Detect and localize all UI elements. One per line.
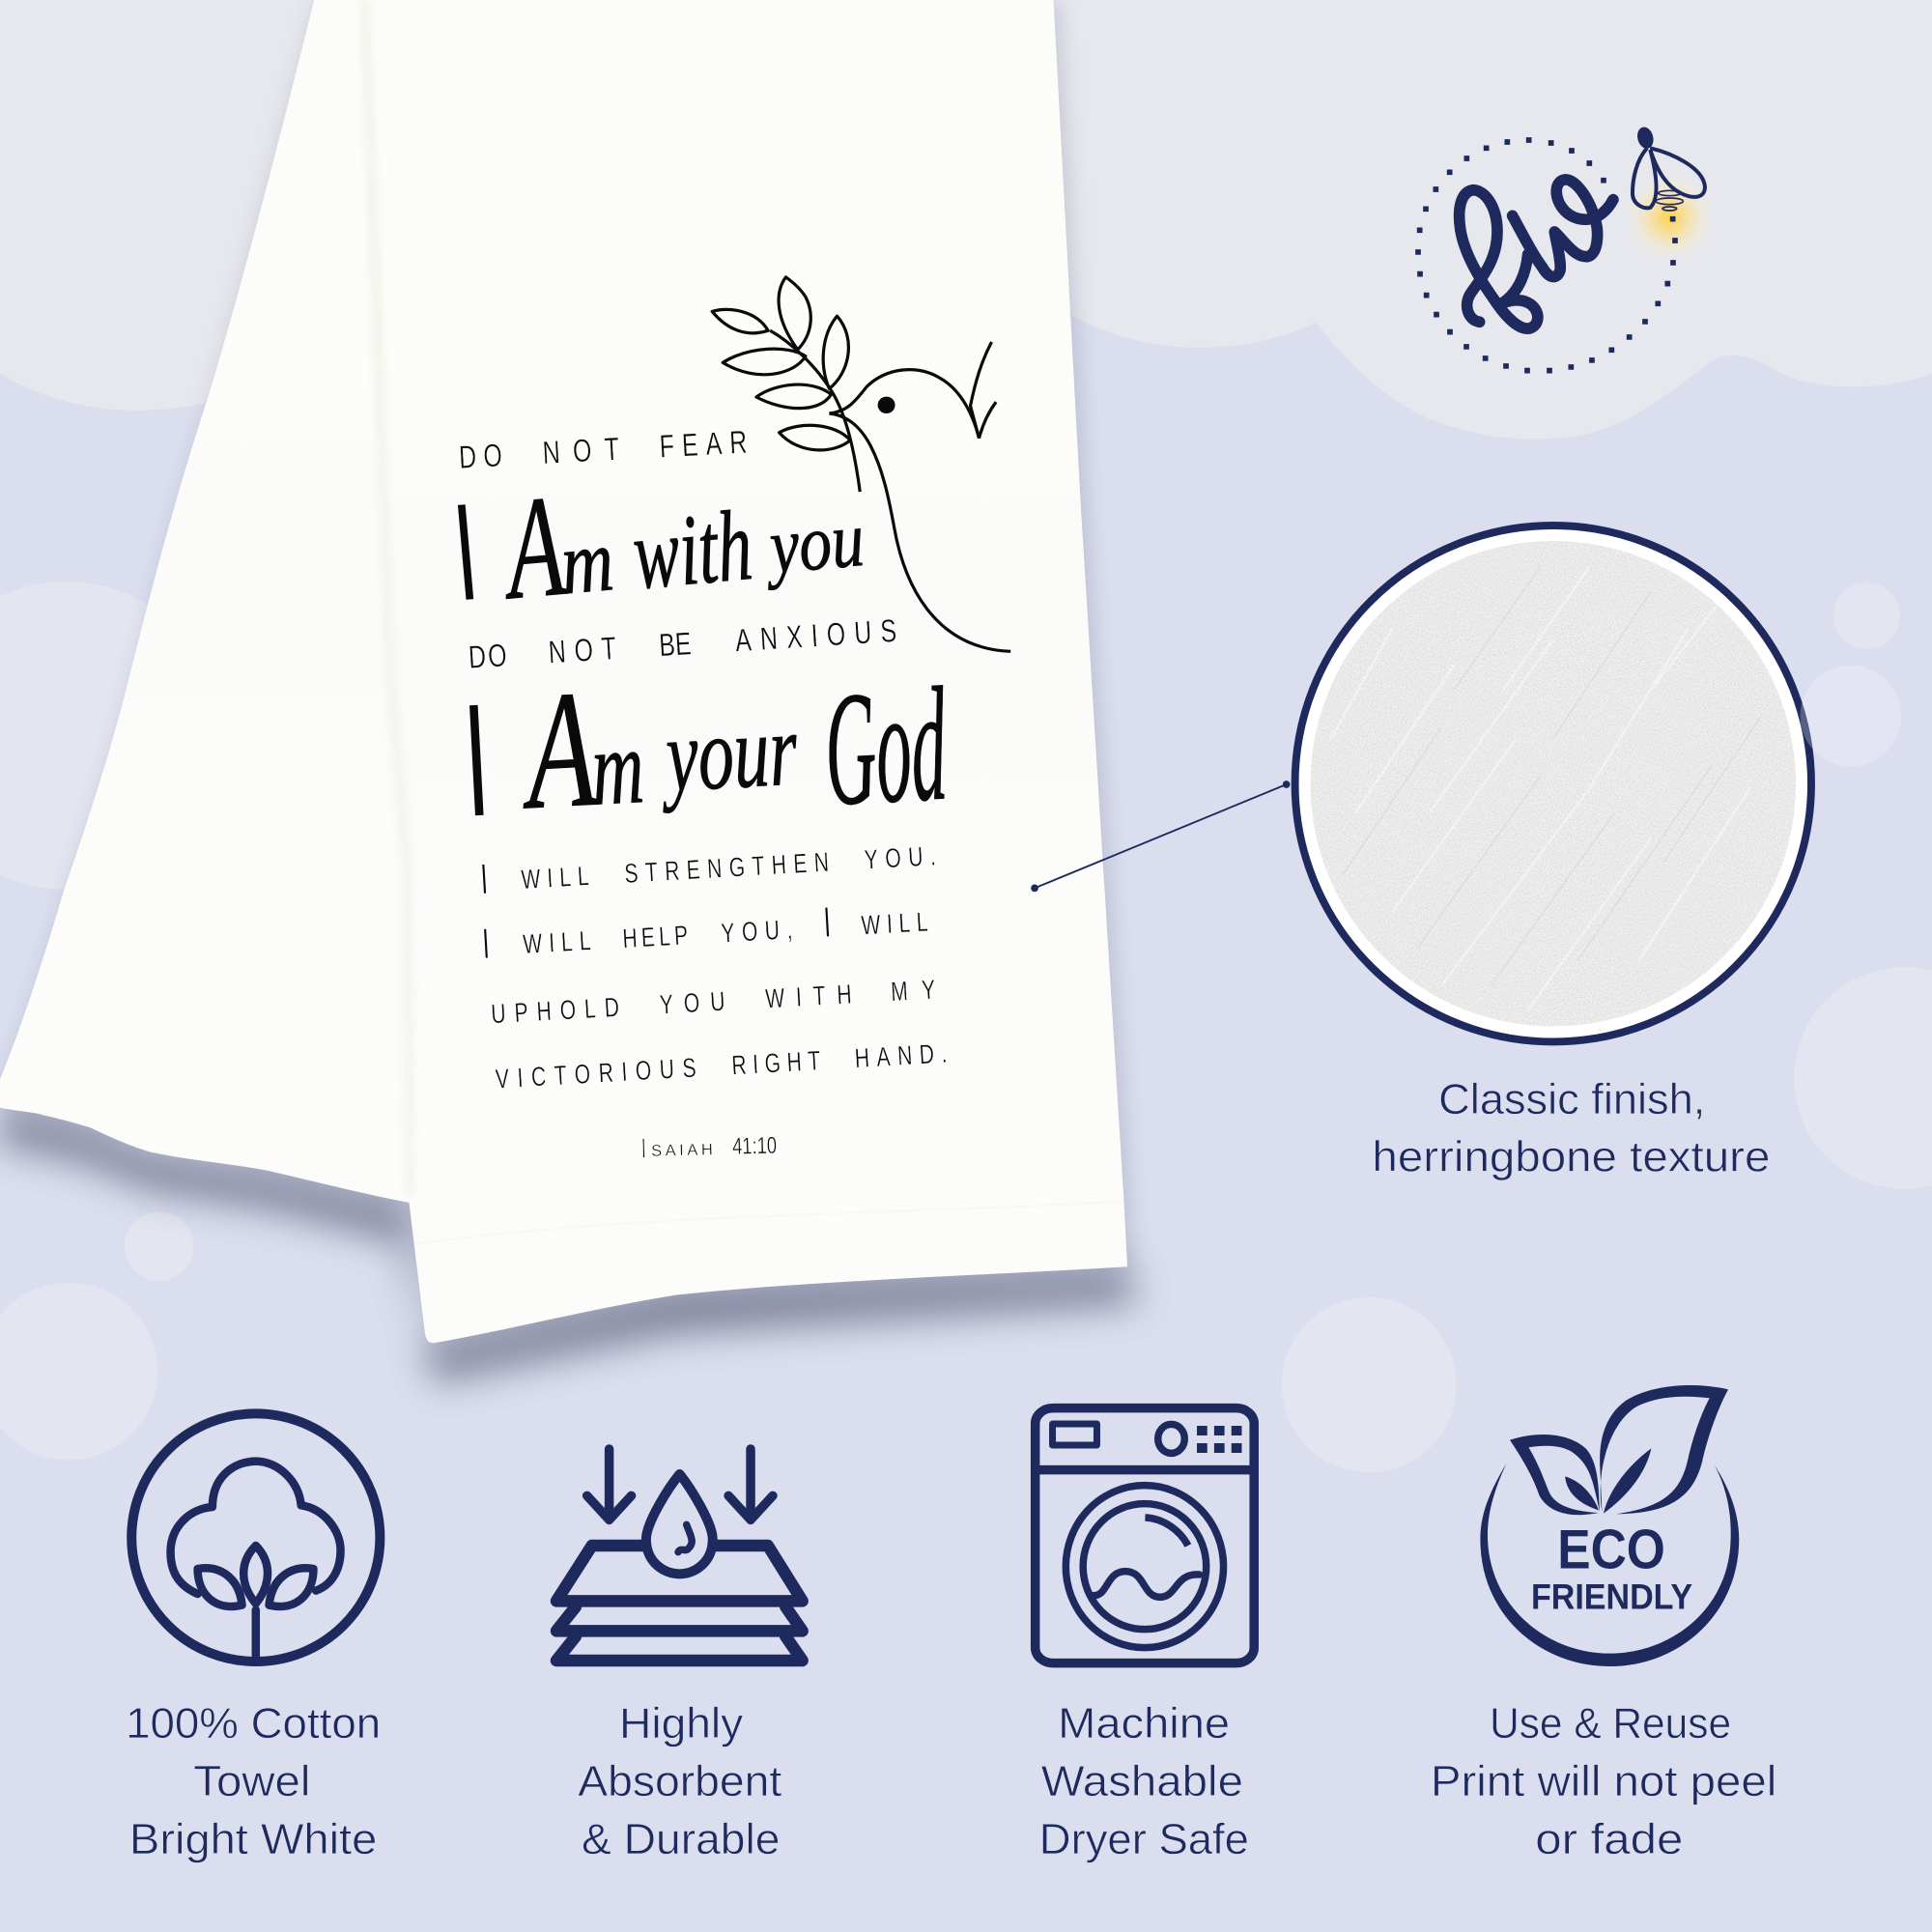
icon: cotton	[131, 1413, 380, 1662]
towel: back fold panel	[0, 0, 419, 1203]
towel text: I will help you, I will	[481, 895, 929, 968]
caption: absorbent: Highly	[619, 1700, 744, 1747]
caption: absorbent: & Durable	[582, 1816, 780, 1863]
towel text: I Am with you: with	[629, 489, 756, 611]
caption: classic finish: herringbone texture	[1372, 1133, 1770, 1180]
towel text: victorious right hand	[495, 1039, 948, 1094]
towel text: I will help you, I will: HELP	[622, 922, 689, 954]
icon: eco friendly badge: ECO	[1557, 1520, 1665, 1581]
caption: reuse: or fade	[1535, 1816, 1683, 1863]
fabric texture circle	[1295, 526, 1811, 1041]
towel text: Isaiah 41:10: I	[641, 1133, 646, 1163]
caption: cotton: Towel	[193, 1758, 310, 1805]
caption: washable: Washable	[1041, 1758, 1243, 1805]
towel text: I will help you, I will: I	[823, 899, 832, 946]
icon: eco friendly badge: FRIENDLY	[1531, 1577, 1692, 1616]
firefly glow	[1621, 169, 1718, 266]
caption: classic finish: Classic finish,	[1438, 1076, 1705, 1123]
towel drop shadow	[0, 0, 1136, 1382]
towel text: I Am with you: I	[448, 475, 483, 630]
towel text: I Am with you	[447, 439, 868, 635]
towel text: Isaiah 41:10	[641, 1130, 777, 1163]
towel text: I will strengthen you: I	[480, 857, 489, 903]
towel text: I will help you, I will: YOU,	[721, 916, 793, 949]
caption: classic finish	[1372, 1076, 1770, 1180]
towel text: I Am with you: A	[495, 465, 571, 631]
caption: washable: Machine	[1058, 1700, 1230, 1747]
towel text: I Am your God: your	[658, 693, 800, 814]
towel text: do not fear: NOT	[542, 431, 620, 471]
towel text: do not be anxious: DO	[468, 638, 508, 676]
towel text: I Am with you: you	[760, 495, 867, 590]
towel text: uphold you with my: YOU	[659, 987, 725, 1020]
firefly	[1633, 126, 1705, 211]
translucent bubble over ring	[1801, 666, 1901, 766]
dotted ring	[1418, 140, 1675, 371]
towel text: victorious right hand: HAND.	[854, 1039, 948, 1074]
caption: absorbent: Absorbent	[578, 1758, 782, 1805]
towel text: uphold you with my: WITH	[765, 980, 852, 1014]
towel text: do not be anxious: ANXIOUS	[734, 612, 897, 659]
towel text: I will help you, I will: I	[482, 921, 491, 968]
icon: eco friendly badge	[1480, 1385, 1739, 1666]
caption: reuse	[1431, 1700, 1776, 1863]
towel text: I will strengthen you: STRENGTHEN	[624, 848, 830, 890]
callout line	[1031, 781, 1290, 892]
towel text: I Am your God: I	[460, 671, 494, 851]
caption: absorbent	[578, 1700, 782, 1863]
towel text: victorious right hand: RIGHT	[731, 1046, 821, 1081]
towel text: do not fear	[458, 424, 748, 476]
towel: front panel	[366, 0, 1127, 1343]
cloud shape background	[0, 0, 1932, 440]
towel text: I will strengthen you: WILL	[521, 862, 589, 895]
background bubbles	[0, 582, 1932, 1472]
towel text: Isaiah 41:10: SAIAH	[651, 1140, 713, 1160]
towel text: I Am with you: m	[557, 510, 617, 612]
towel text: uphold you with my	[491, 976, 936, 1030]
towel text: do not be anxious	[468, 612, 897, 676]
towel hem	[414, 1202, 1123, 1244]
towel text: I Am your God: m	[588, 707, 646, 828]
icon: washing machine	[1036, 1408, 1254, 1663]
towel text: I Am your God: A	[515, 655, 601, 844]
logo	[1418, 126, 1718, 371]
towel text: do not be anxious: NOT	[548, 631, 617, 670]
caption: washable: Dryer Safe	[1039, 1816, 1249, 1863]
towel text: I will strengthen you: YOU.	[864, 842, 937, 875]
towel text: I will help you, I will: WILL	[861, 908, 928, 941]
caption: cotton	[126, 1700, 381, 1863]
dove with olive branch	[712, 277, 1010, 651]
towel fold crease	[359, 0, 414, 1195]
caption: reuse: Use & Reuse	[1490, 1700, 1731, 1747]
towel text: uphold you with my: MY	[890, 976, 936, 1008]
script monogram	[1460, 180, 1613, 328]
towel text: uphold you with my: UPHOLD	[491, 993, 620, 1030]
towel text: I will help you, I will: WILL	[523, 926, 591, 960]
text: God	[820, 654, 951, 840]
towel text: I will strengthen you	[480, 831, 937, 903]
caption: washable	[1039, 1700, 1249, 1863]
towel text: victorious right hand: VICTORIOUS	[495, 1054, 696, 1094]
towel text: Isaiah 41:10: 41:10	[732, 1133, 777, 1160]
towel text: I Am your God	[459, 637, 951, 859]
caption: reuse: Print will not peel	[1431, 1758, 1776, 1805]
icon: absorbent layers	[556, 1449, 803, 1661]
towel text: do not fear: FEAR	[659, 424, 748, 465]
towel text: do not be anxious: BE	[658, 626, 693, 664]
caption: cotton: 100% Cotton	[126, 1700, 381, 1747]
towel text: do not fear: DO	[458, 438, 503, 476]
caption: cotton: Bright White	[129, 1816, 377, 1863]
